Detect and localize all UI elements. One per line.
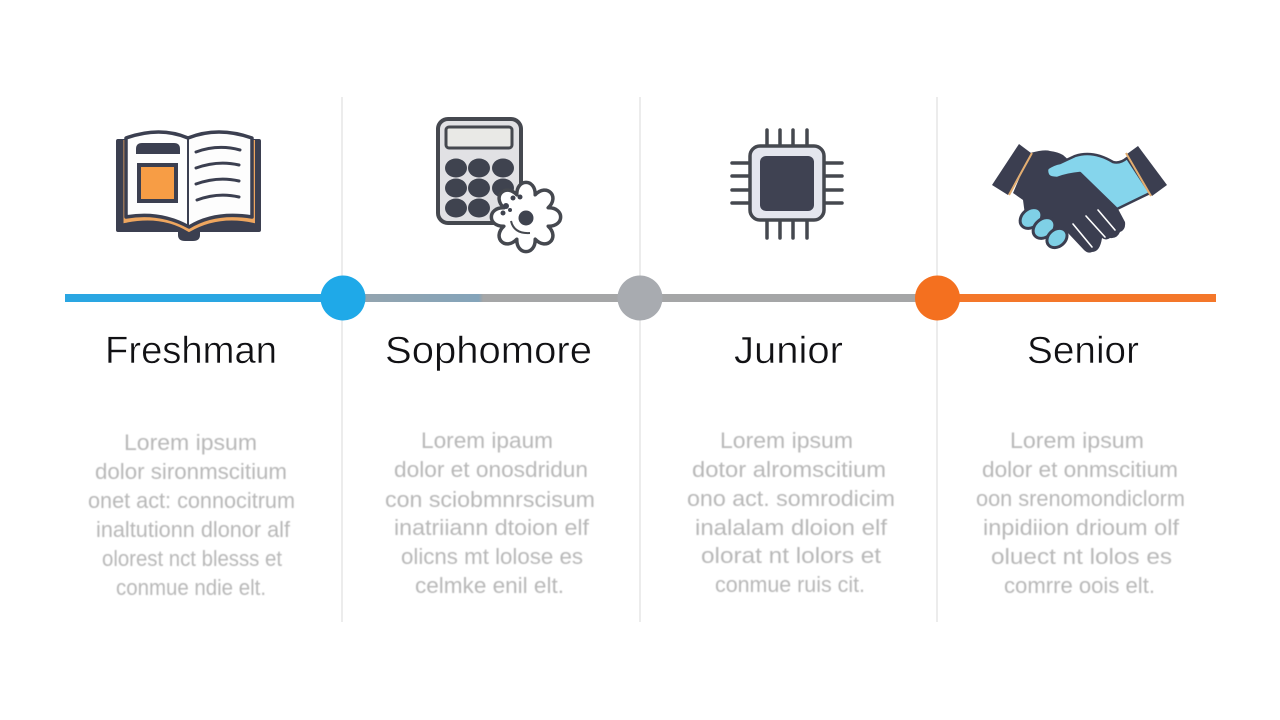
- icon: handshake: [992, 144, 1167, 253]
- icon: microchip: [732, 130, 842, 238]
- text block: freshman description: inaltutionn dlonor alf: [96, 517, 291, 542]
- text block: senior description: Lorem ipsum: [1010, 428, 1144, 453]
- panel: freshman: [88, 132, 295, 600]
- text block: sophomore description: celmke enil elt.: [415, 573, 564, 598]
- text block: freshman description: onet act: connocitrum: [88, 488, 295, 513]
- timeline: [65, 276, 1216, 320]
- heading: Senior: Senior: [1027, 330, 1139, 372]
- marker: sophomore: [618, 276, 662, 320]
- panel: senior: [976, 144, 1185, 598]
- text block: junior description: inalalam dloion elf: [695, 515, 888, 540]
- text block: junior description: [687, 428, 895, 597]
- heading: Freshman: Freshman: [105, 330, 277, 372]
- text block: senior description: comrre oois elt.: [1004, 573, 1155, 598]
- text block: junior description: olorat nt lolors et: [701, 543, 881, 568]
- text block: senior description: [976, 428, 1185, 598]
- text block: senior description: oluect nt lolos es: [991, 544, 1172, 569]
- marker: senior: [915, 276, 960, 320]
- text block: freshman description: [88, 430, 295, 600]
- text block: freshman description: conmue ndie elt.: [116, 575, 266, 600]
- icon: open book: [116, 132, 261, 241]
- marker: freshman: [320, 276, 366, 320]
- text block: sophomore description: [385, 428, 595, 598]
- text block: freshman description: olorest nct blesss et: [102, 546, 282, 571]
- icon: calculator with gear: [438, 119, 561, 252]
- text block: senior description: inpidiion drioum olf: [983, 515, 1180, 540]
- heading: Junior: Junior: [734, 330, 843, 372]
- text block: junior description: conmue ruis cit.: [715, 572, 865, 597]
- panel: sophomore: [385, 119, 595, 598]
- text block: sophomore description: Lorem ipaum: [421, 428, 553, 453]
- text block: freshman description: dolor sironmscitium: [95, 459, 287, 484]
- heading: Sophomore: Sophomore: [385, 330, 592, 372]
- text block: sophomore description: inatriiann dtoion elf: [394, 515, 590, 540]
- text block: sophomore description: olicns mt lolose es: [401, 544, 583, 569]
- text block: senior description: oon srenomondiclorm: [976, 486, 1185, 511]
- text block: freshman description: Lorem ipsum: [124, 430, 257, 455]
- text block: junior description: ono act. somrodicim: [687, 486, 895, 511]
- text block: senior description: dolor et onmscitium: [982, 457, 1178, 482]
- text block: sophomore description: dolor et onosdridun: [394, 457, 588, 482]
- panel: junior: [687, 130, 895, 597]
- text block: junior description: dotor alromscitium: [692, 457, 886, 482]
- text block: sophomore description: con sciobmnrscisum: [385, 487, 595, 512]
- text block: junior description: Lorem ipsum: [720, 428, 853, 453]
